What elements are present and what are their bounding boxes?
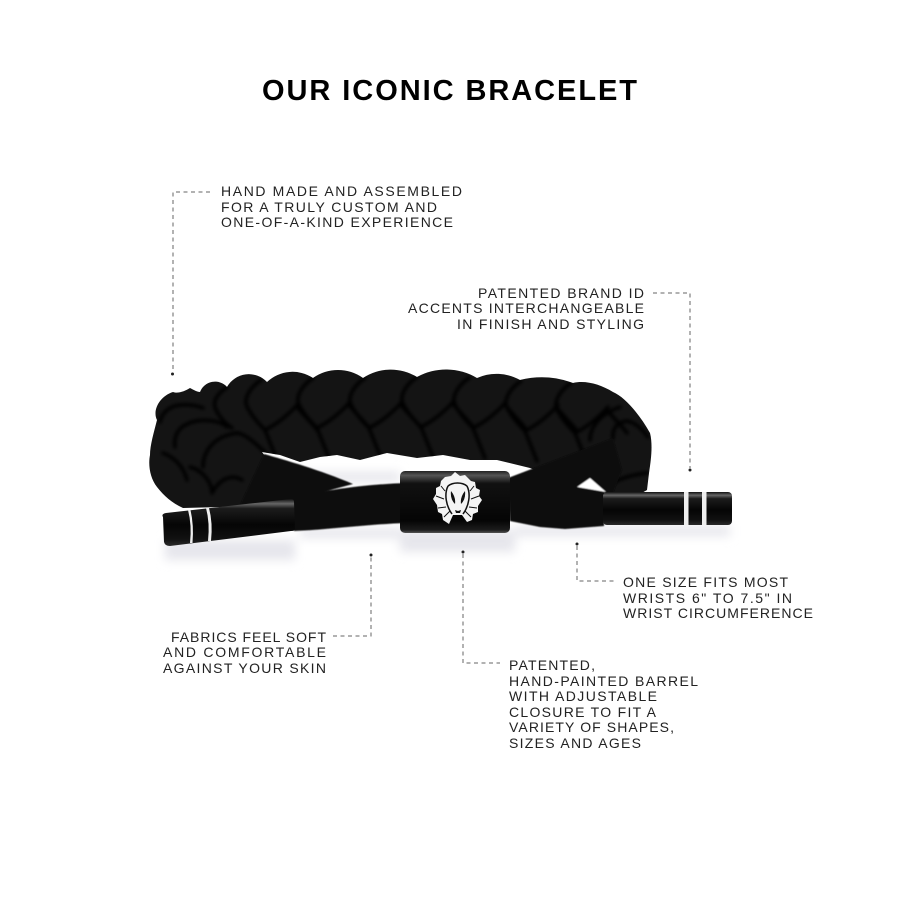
text: barrel: CLOSURE TO FIT A (509, 704, 657, 720)
text: hand made: HAND MADE AND ASSEMBLED (221, 183, 462, 199)
leader line: one size (576, 542, 614, 581)
left aglet (162, 499, 295, 546)
text: fabrics: FABRICS FEEL SOFT (171, 629, 326, 645)
text: hand made (221, 183, 462, 230)
callout: barrel (462, 550, 698, 751)
barrel (400, 471, 510, 533)
text: barrel: WITH ADJUSTABLE (509, 688, 657, 704)
callout: fabrics (163, 554, 372, 676)
text: one size: WRISTS 6" TO 7.5" IN (623, 590, 792, 606)
text: brand id: PATENTED BRAND ID (478, 285, 644, 301)
callout: brand id (408, 285, 692, 472)
text: one size: WRIST CIRCUMFERENCE (623, 605, 813, 621)
text: fabrics: AGAINST YOUR SKIN (163, 660, 326, 676)
bracelet (140, 360, 732, 560)
text: one size: ONE SIZE FITS MOST (623, 574, 788, 590)
text: brand id (408, 285, 644, 332)
text: barrel: HAND-PAINTED BARREL (509, 673, 698, 689)
straps (240, 438, 622, 531)
icon: lion logo (433, 472, 482, 524)
callout: one size (576, 542, 813, 621)
text: fabrics: AND COMFORTABLE (163, 644, 326, 660)
leader line: brand id (653, 293, 692, 472)
right aglet (603, 492, 732, 525)
braided band (149, 370, 652, 508)
text: brand id: IN FINISH AND STYLING (457, 316, 644, 332)
leader line: hand made (171, 192, 210, 376)
text: hand made: ONE-OF-A-KIND EXPERIENCE (221, 214, 453, 230)
right strap (508, 438, 622, 529)
text: brand id: ACCENTS INTERCHANGEABLE (408, 300, 644, 316)
text: fabrics (163, 629, 326, 676)
leader line: fabrics (333, 554, 372, 636)
text: barrel: VARIETY OF SHAPES, (509, 719, 674, 735)
text: barrel: PATENTED, (509, 657, 595, 673)
text: barrel (509, 657, 698, 751)
text: one size (623, 574, 813, 621)
right hole (577, 478, 606, 492)
callout: hand made (171, 183, 462, 376)
reflection shadow (165, 472, 730, 560)
left strap wedge (240, 454, 353, 505)
text: hand made: FOR A TRULY CUSTOM AND (221, 199, 437, 215)
text: barrel: SIZES AND AGES (509, 735, 641, 751)
braid creases (160, 377, 648, 493)
left strap (292, 483, 407, 531)
leader line: barrel (462, 550, 500, 663)
title: OUR ICONIC BRACELET (262, 75, 637, 107)
